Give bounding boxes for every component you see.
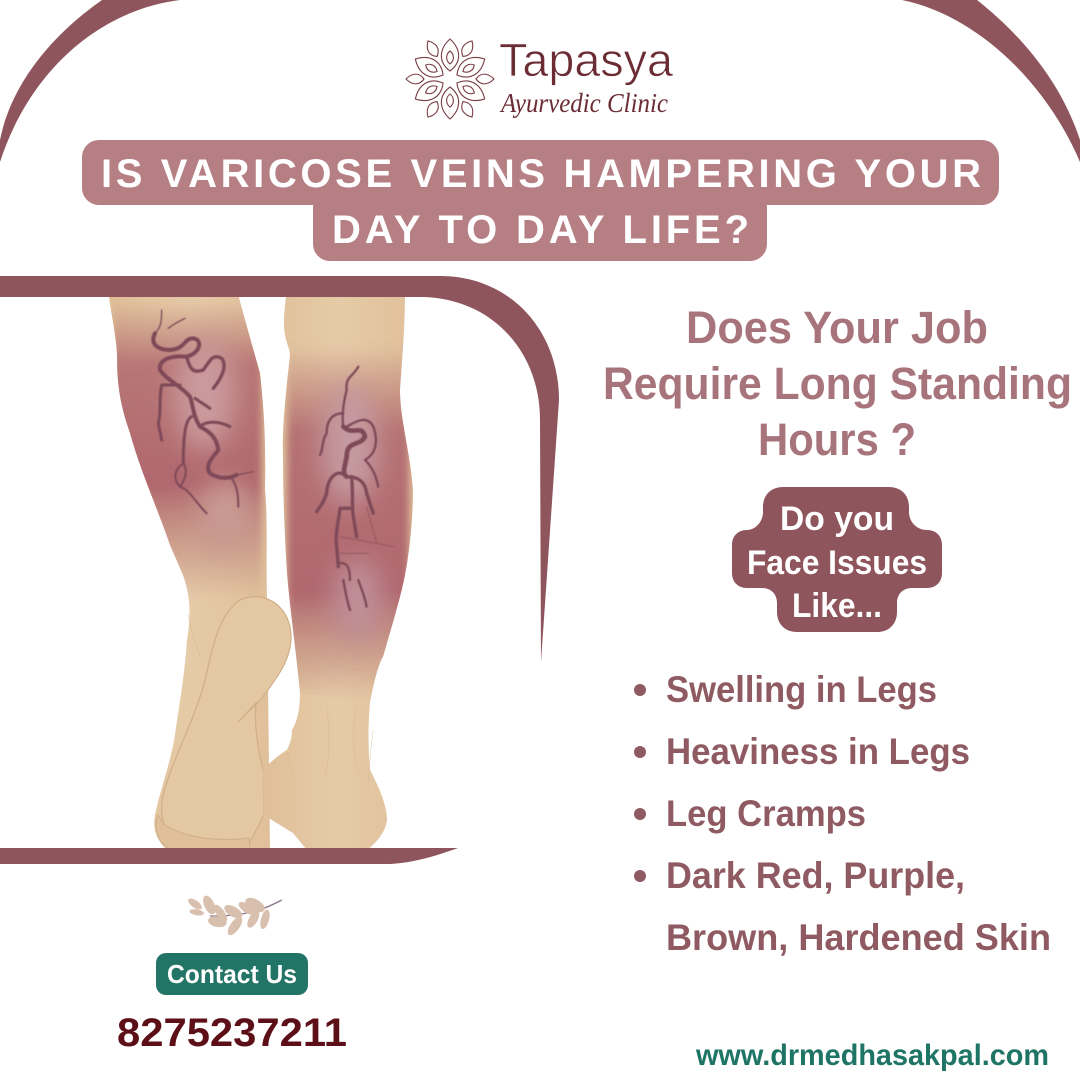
website: www.drmedhasakpal.com bbox=[695, 1039, 1049, 1072]
phone number: 8275237211 bbox=[117, 1011, 347, 1055]
raised foot sole bbox=[162, 597, 291, 842]
bullet: swelling bbox=[634, 684, 646, 696]
symptom: cramps: Leg Cramps bbox=[666, 793, 866, 834]
title banner bbox=[82, 140, 999, 261]
logo bbox=[406, 34, 673, 120]
standing leg discoloration bbox=[287, 340, 409, 710]
banner line 1 background bbox=[82, 140, 999, 205]
title line 2: DAY TO DAY LIFE? bbox=[332, 208, 749, 252]
illustration: legs with varicose veins bbox=[108, 290, 413, 850]
banner line 2 background bbox=[313, 190, 767, 261]
callout: do you face issues like bbox=[732, 487, 942, 632]
heel detail lines bbox=[188, 613, 373, 787]
top-right corner arc bbox=[902, 0, 1080, 162]
raised foot toes bbox=[156, 815, 250, 850]
frame: bottom band bbox=[0, 848, 458, 864]
symptom: skin line 2: Brown, Hardened Skin bbox=[666, 917, 1051, 958]
contact us button bbox=[156, 953, 308, 995]
button label: Contact Us bbox=[167, 959, 297, 989]
veins bbox=[153, 310, 393, 610]
callout line 2: Face Issues bbox=[747, 544, 927, 582]
bullet: heaviness bbox=[634, 746, 646, 758]
symptom: swelling: Swelling in Legs bbox=[666, 669, 937, 710]
standing leg bbox=[262, 290, 413, 850]
bullet: cramps bbox=[634, 808, 646, 820]
icon: lotus flower logo mark bbox=[406, 38, 494, 120]
heading line 3: Hours ? bbox=[758, 414, 916, 465]
button background bbox=[156, 953, 308, 995]
top-left corner arc bbox=[0, 0, 180, 162]
icon: leaf sprig bbox=[186, 894, 282, 937]
heading line 1: Does Your Job bbox=[686, 302, 988, 353]
callout line 3: Like... bbox=[792, 587, 882, 625]
raised leg bbox=[108, 290, 270, 850]
logo name: Tapasya bbox=[499, 34, 673, 86]
raised leg discoloration bbox=[112, 290, 262, 610]
frame: curved band around illustration bbox=[0, 276, 559, 662]
symptom: heaviness: Heaviness in Legs bbox=[666, 731, 970, 772]
symptom: skin line 1: Dark Red, Purple, bbox=[666, 855, 965, 896]
symptom list bbox=[634, 669, 1051, 958]
bullet: skin bbox=[634, 870, 646, 882]
callout cross-shaped background bbox=[732, 487, 942, 632]
logo tagline: Ayurvedic Clinic bbox=[499, 88, 668, 118]
heading: long standing hours bbox=[603, 302, 1072, 465]
callout line 1: Do you bbox=[780, 500, 894, 538]
title line 1: IS VARICOSE VEINS HAMPERING YOUR bbox=[101, 152, 981, 196]
